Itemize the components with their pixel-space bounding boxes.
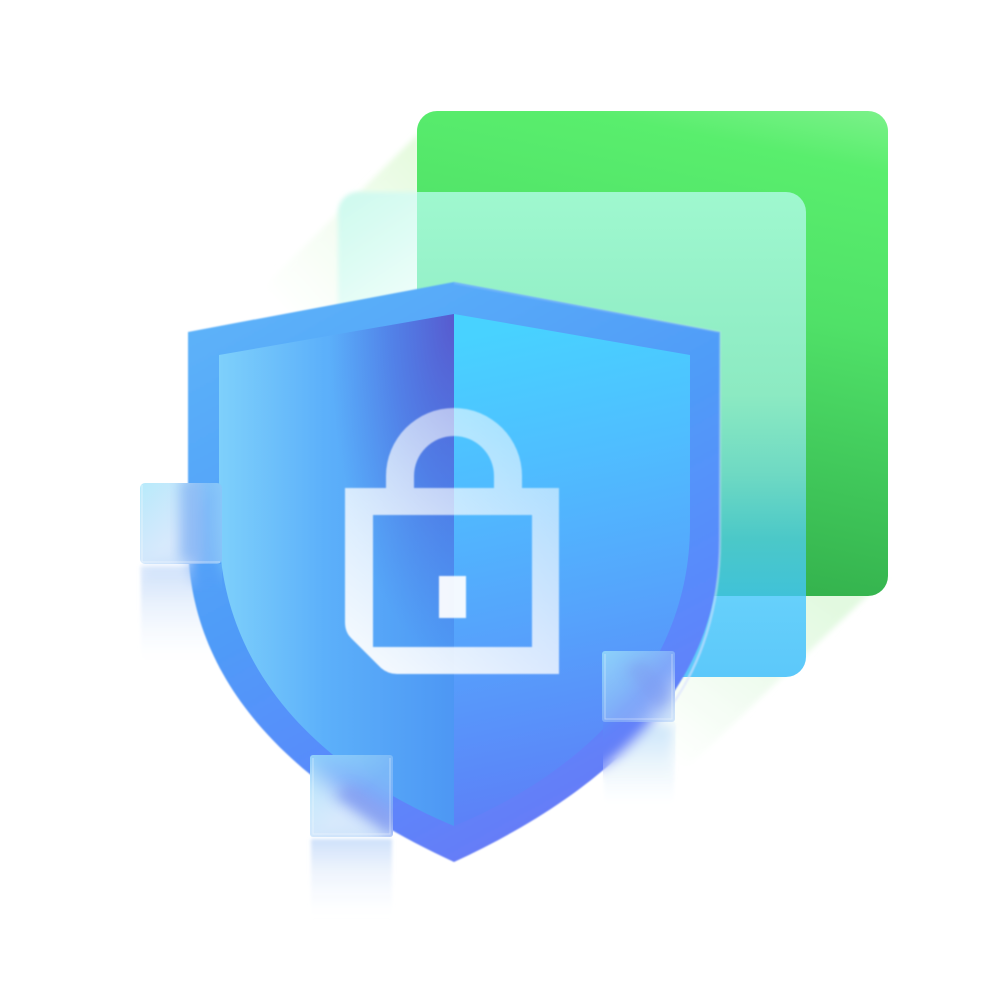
long shadow: top left (225, 132, 420, 325)
padlock keyhole (439, 576, 466, 618)
faded left edge of glass square (338, 192, 428, 322)
shield outer frame (188, 282, 720, 862)
glass chip: right (602, 651, 675, 722)
frosted edge below right chip (603, 722, 674, 776)
padlock icon (345, 408, 559, 674)
green back square (417, 111, 888, 596)
shield right edge highlight (454, 283, 720, 705)
shield right face (454, 314, 690, 826)
padlock body and shackle (345, 408, 559, 674)
long shadow: bottom right (640, 578, 886, 803)
glass chip: bottom (310, 755, 393, 837)
glass square over green (417, 192, 806, 596)
shield left face (219, 314, 454, 826)
reflection trail under left chip (141, 566, 221, 664)
illustration: security shield with padlock (140, 111, 888, 889)
reflection trail under right chip (604, 724, 674, 808)
glass square lower part (417, 596, 806, 677)
reflection trail under bottom chip (311, 839, 392, 918)
shield left face dark fold (219, 314, 454, 826)
frosted edge below left chip (142, 564, 222, 586)
shield (188, 282, 720, 862)
glass chip: left (140, 483, 222, 564)
